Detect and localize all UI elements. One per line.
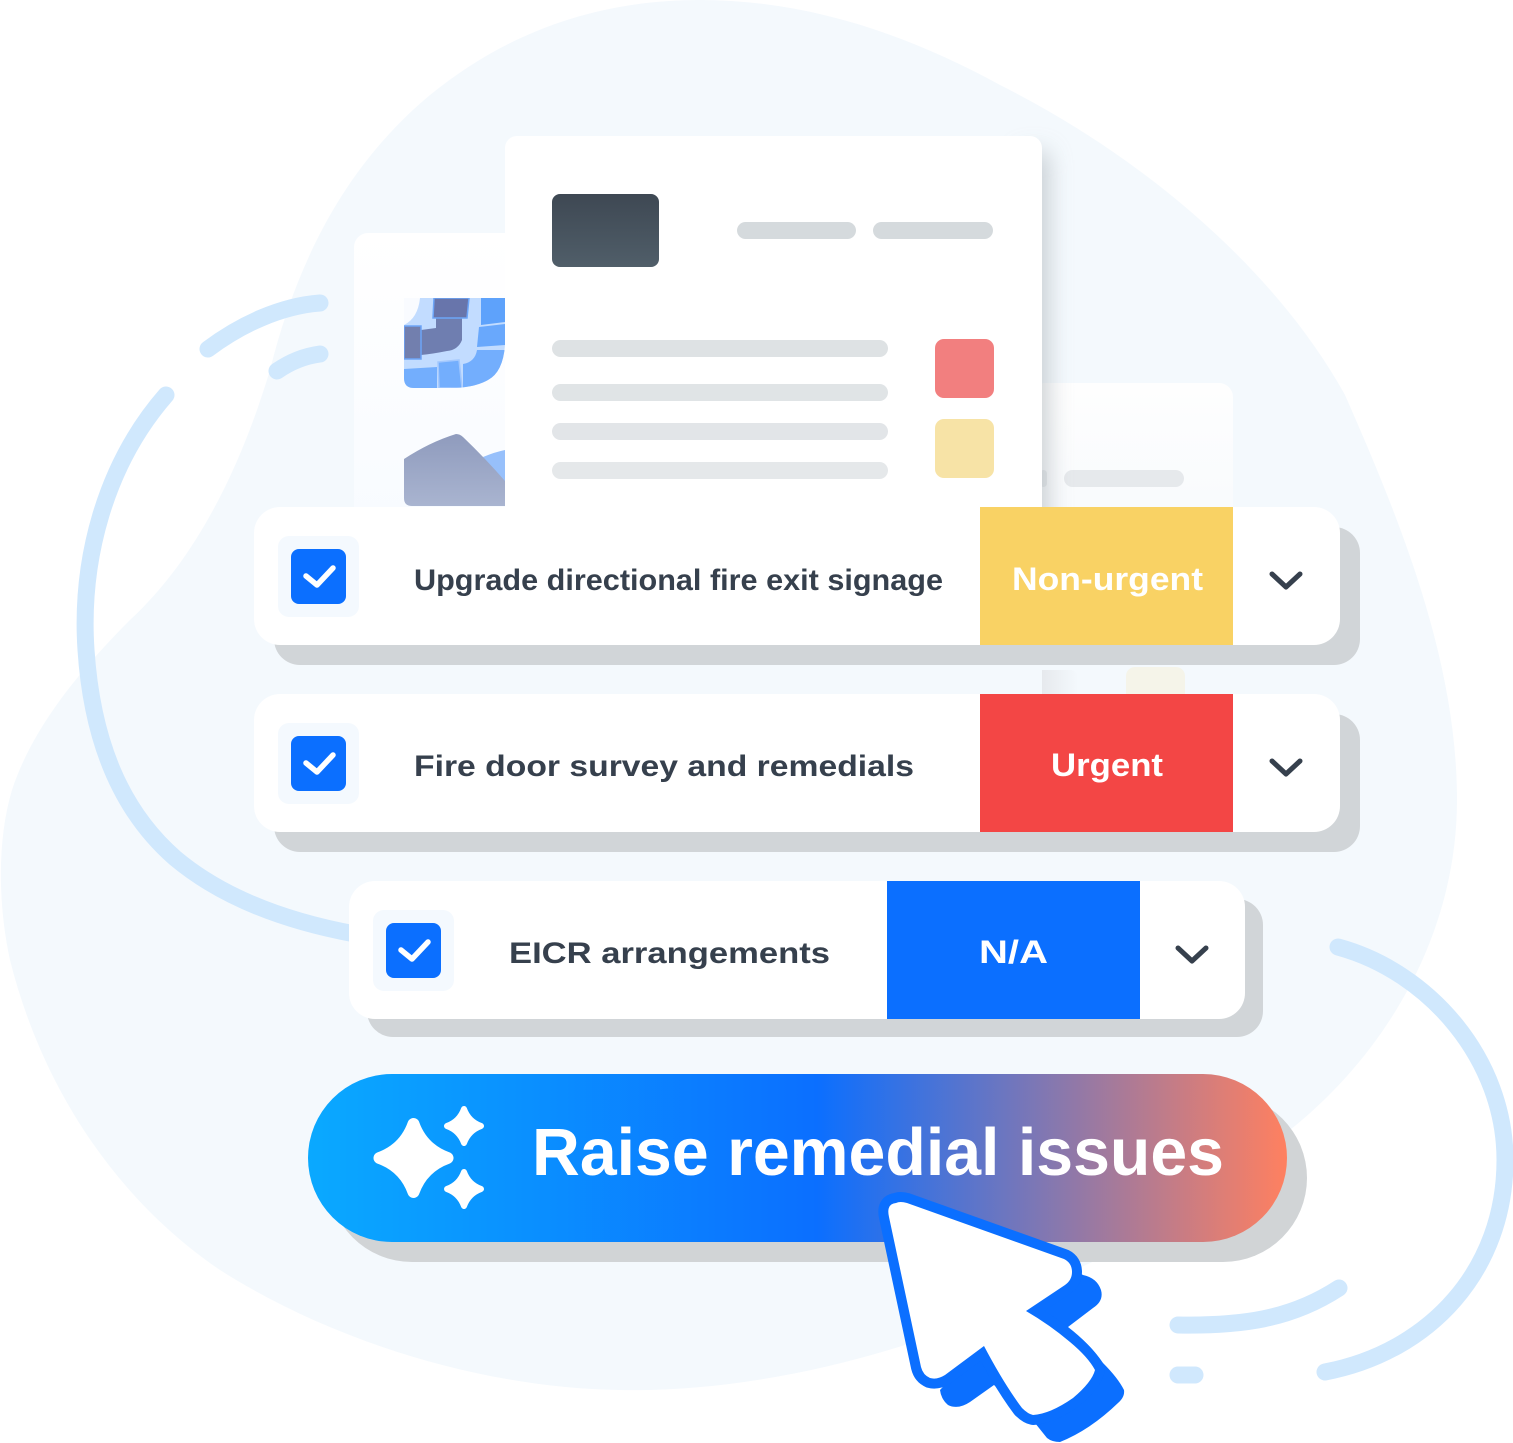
chevron	[1272, 761, 1300, 774]
checkbox	[278, 723, 359, 804]
header pills	[737, 222, 993, 239]
checkbox	[373, 910, 454, 991]
status: non-urgent: Non-urgent	[1012, 561, 1203, 597]
status: urgent	[980, 694, 1233, 832]
raise remedial issues button	[308, 1074, 1307, 1262]
status: non-urgent	[980, 507, 1233, 645]
status: N/A	[887, 881, 1140, 1019]
back-right document card	[1030, 383, 1233, 703]
task row: fire door survey	[254, 694, 1360, 852]
task label: Upgrade directional fire exit signage	[414, 564, 943, 597]
red status square	[935, 339, 994, 398]
icon: mouse cursor	[888, 1202, 1124, 1442]
chevron	[1272, 574, 1300, 587]
back-left document card	[354, 233, 505, 506]
chevron	[1178, 948, 1206, 961]
status: urgent: Urgent	[1051, 747, 1163, 783]
task row: EICR arrangements	[349, 881, 1263, 1037]
task row: fire exit signage	[254, 507, 1360, 665]
logo block	[552, 194, 659, 267]
status: N/A: N/A	[979, 934, 1048, 970]
area chart thumbnail	[404, 434, 505, 506]
floor plan thumbnail	[404, 298, 505, 388]
button label: Raise remedial issues	[532, 1115, 1224, 1190]
icon: sparkles	[380, 1109, 481, 1206]
task label: Fire door survey and remedials	[414, 750, 914, 783]
checkbox	[278, 536, 359, 617]
decorative motion curves	[85, 303, 1505, 1375]
task label: EICR arrangements	[509, 937, 830, 970]
yellow status square	[935, 419, 994, 478]
text lines	[552, 340, 888, 479]
main document card	[505, 136, 1048, 552]
